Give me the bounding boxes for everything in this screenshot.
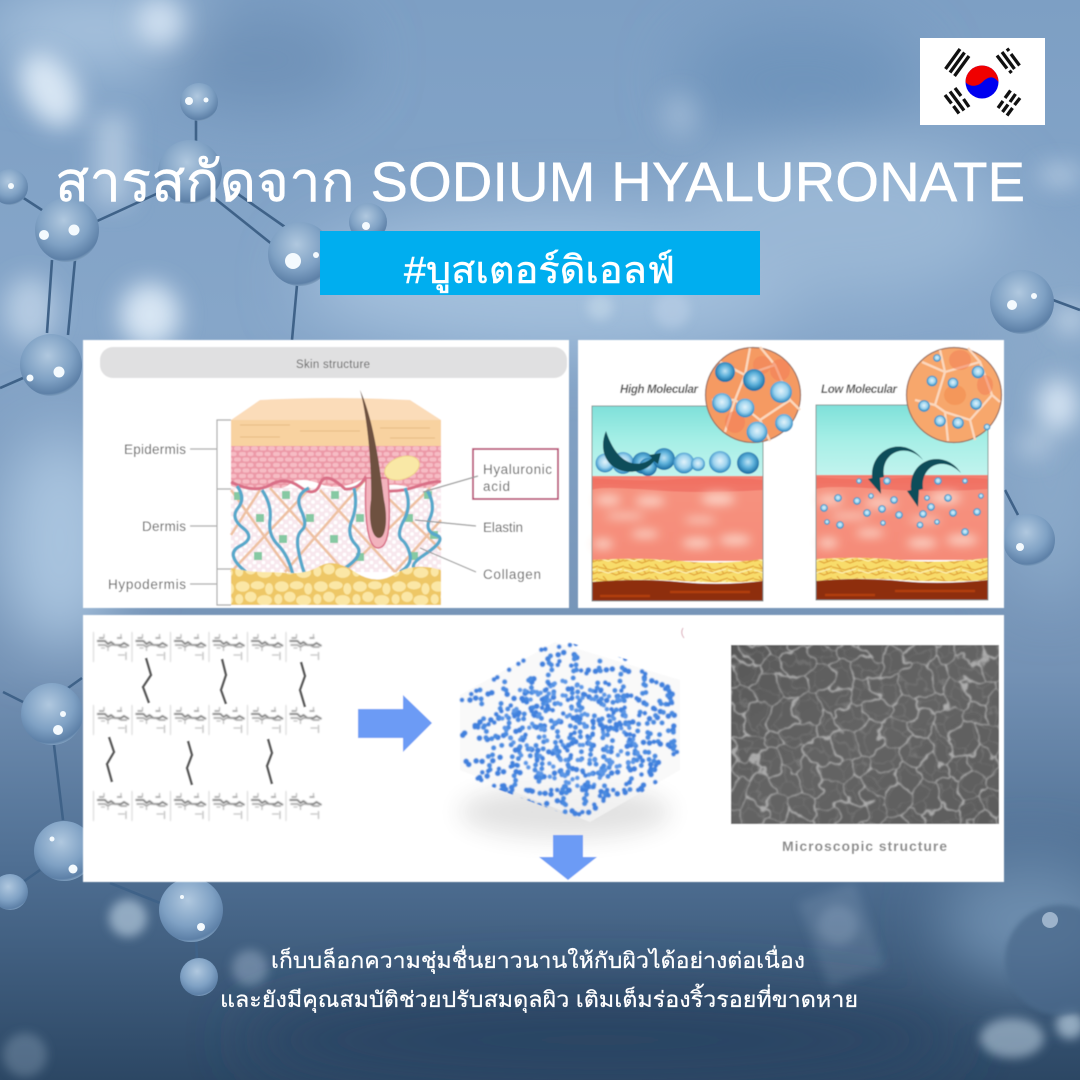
tag banner: #บูสเตอร์ดิเอลฟ์ (404, 249, 675, 293)
3D gel network (460, 640, 680, 838)
microscopic structure caption: Microscopic structure (782, 838, 947, 854)
title: สารสกัดจาก SODIUM HYALURONATE (55, 150, 1025, 213)
hyaluronic acid callout (423, 449, 558, 499)
trigrams (945, 48, 1020, 116)
arrow (603, 431, 661, 472)
tag banner (320, 231, 760, 295)
layer labels: Hypodermis (108, 577, 186, 592)
panel: molecular cross-linking (83, 615, 1030, 882)
chain formula rows (93, 632, 324, 827)
bonds (0, 120, 1080, 960)
low molecular small spheres (820, 478, 984, 536)
taegeuk (966, 66, 998, 98)
high molecular label: High Molecular (620, 384, 699, 396)
sphere highlights (8, 97, 1037, 931)
microscopic image (730, 644, 1000, 825)
elastin label (415, 520, 523, 535)
bottom description: และยังมีคุณสมบัติช่วยปรับสมดุลผิว เติมเต็มร่องริ้วรอยที่ขาดหาย (220, 984, 858, 1013)
cross-links (107, 658, 305, 785)
skin structure header: Skin structure (296, 359, 370, 371)
hair and follicle (360, 390, 389, 548)
high molecular spheres (596, 448, 759, 476)
collagen label (420, 548, 541, 582)
fat gland (381, 452, 423, 484)
layer labels: Epidermis (124, 442, 186, 457)
low molecular magnified circle (906, 348, 1002, 442)
low molecular label: Low Molecular (821, 384, 898, 396)
hyaluronic acid callout: acid (483, 479, 510, 494)
high molecular skin diagram (592, 406, 763, 601)
collagen strands (233, 486, 440, 575)
high molecular magnified circle (706, 347, 800, 442)
flag: South Korea (920, 38, 1045, 125)
low molecular skin diagram (816, 405, 988, 600)
skin cross-section diagram (231, 390, 441, 605)
bottom description (220, 945, 858, 1013)
panel: molecular weight penetration (578, 340, 1004, 608)
faint mark (682, 628, 684, 638)
layer labels (108, 442, 186, 592)
elastin label: Elastin (483, 520, 523, 535)
penetrating arrows (868, 447, 961, 507)
skin structure header (100, 347, 567, 378)
elastin nodes (234, 491, 438, 561)
down arrow (539, 835, 597, 880)
layer labels: Dermis (142, 519, 186, 534)
collagen label: Collagen (483, 567, 541, 582)
hyaluronic acid callout: Hyaluronic (483, 462, 552, 477)
right arrow (358, 695, 432, 752)
bottom description: เก็บบล็อกความชุ่มชื่นยาวนานให้กับผิวได้อย่างต่อเนื่อง (271, 945, 805, 974)
layer brackets (190, 420, 231, 605)
panel: skin structure (83, 340, 569, 608)
